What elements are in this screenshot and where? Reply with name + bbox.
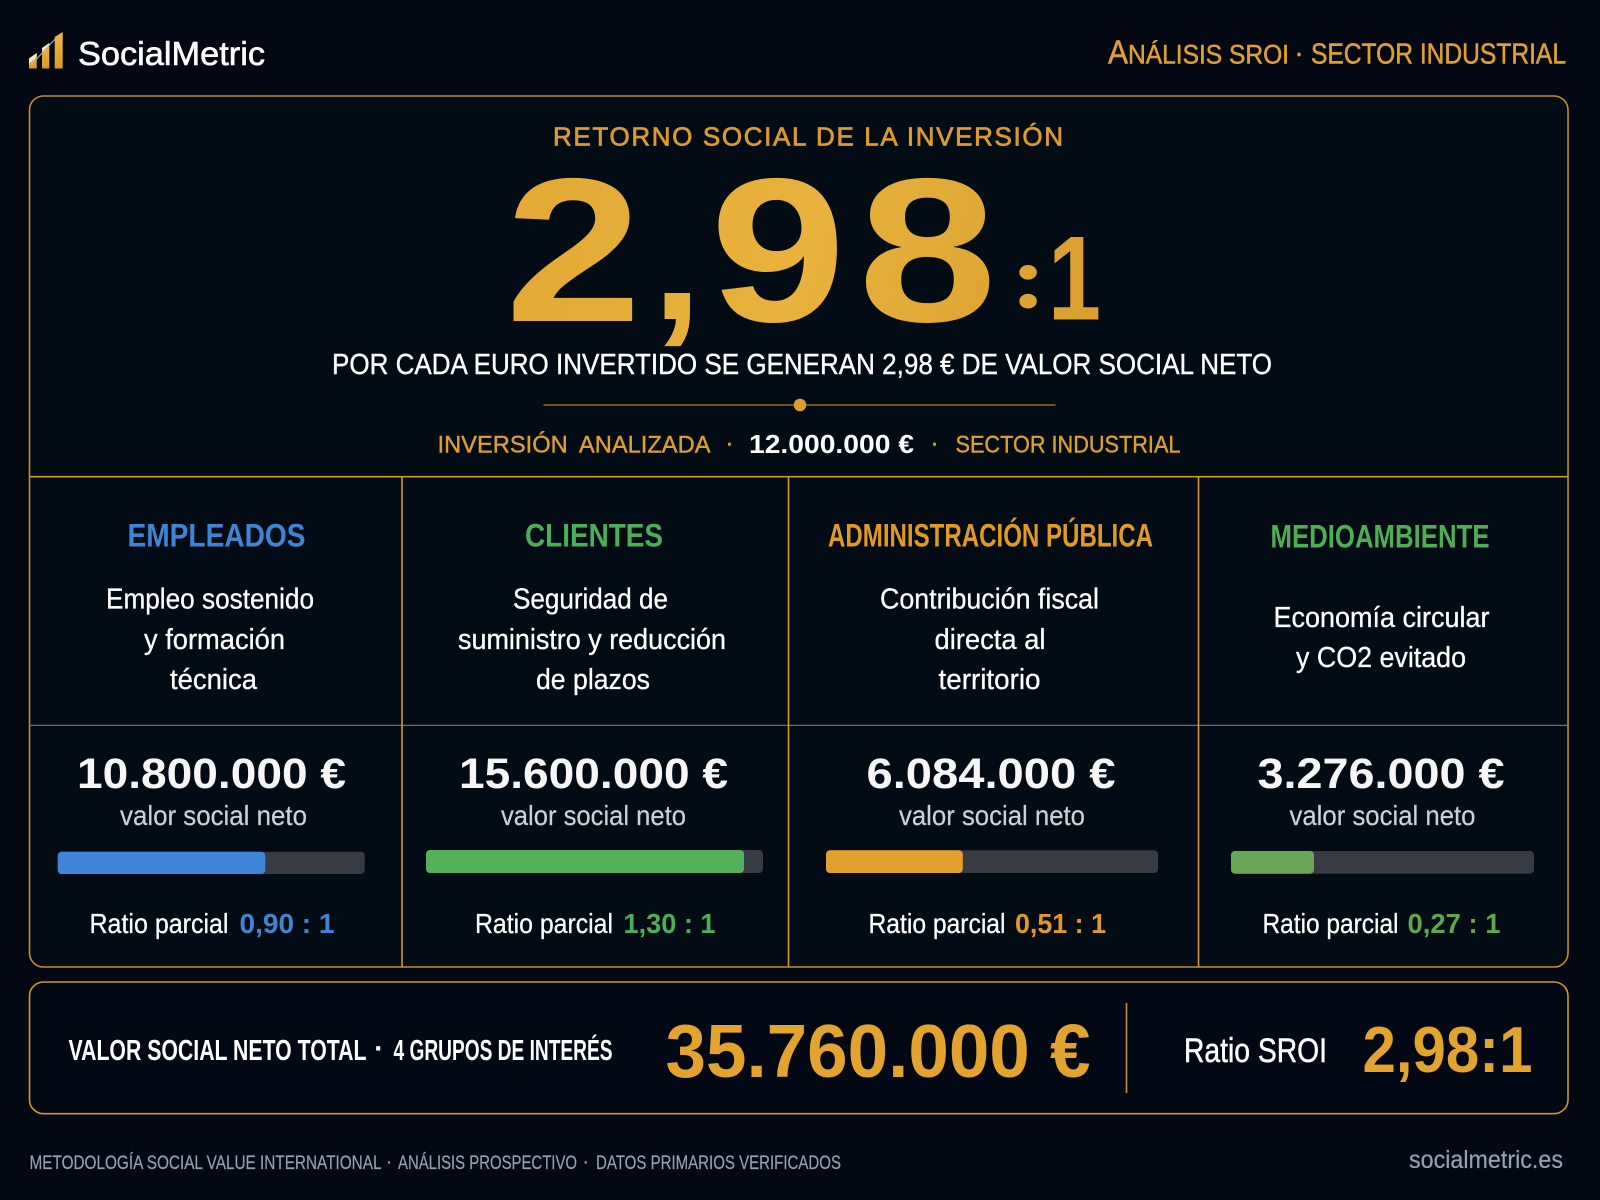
heading: CLIENTES xyxy=(525,518,663,554)
investment info line: 12.000.000 € xyxy=(749,429,914,459)
subtitle: POR CADA EURO INVERTIDO SE GENERAN 2,98 € DE VALOR SOCIAL NETO xyxy=(332,349,1272,381)
footer xyxy=(30,1146,1563,1174)
big ratio 2,98:1: : xyxy=(1010,228,1046,327)
methodology note: ANÁLISIS PROSPECTIVO xyxy=(398,1153,577,1174)
progress bar xyxy=(826,850,1158,873)
partial ratio xyxy=(90,908,334,939)
logo wordmark: SocialMetric xyxy=(78,35,265,72)
big ratio 2,98:1: 2 xyxy=(505,136,642,365)
partial ratio: Ratio parcial xyxy=(90,908,228,939)
column: medioambiente xyxy=(1231,518,1534,939)
description: directa al xyxy=(934,624,1046,656)
value: 15.600.000 € xyxy=(459,750,728,798)
icon: SocialMetric logo bars xyxy=(29,32,63,68)
description: suministro y reducción xyxy=(458,624,726,656)
methodology note: · xyxy=(583,1152,589,1173)
description: técnica xyxy=(170,664,258,696)
website: socialmetric.es xyxy=(1409,1146,1563,1174)
description xyxy=(106,583,314,696)
description: Contribución fiscal xyxy=(880,583,1099,615)
value caption: valor social neto xyxy=(1290,800,1476,831)
header xyxy=(29,32,1566,72)
investment info line: SECTOR INDUSTRIAL xyxy=(956,432,1180,459)
partial ratio: 1,30 : 1 xyxy=(624,908,716,939)
description: Empleo sostenido xyxy=(106,583,314,615)
progress bar xyxy=(1231,851,1534,874)
progress bar xyxy=(58,852,365,874)
hero label: RETORNO SOCIAL DE LA INVERSIÓN xyxy=(553,122,1063,152)
partial ratio xyxy=(868,908,1106,939)
total value: 35.760.000 € xyxy=(666,1009,1090,1093)
value: 6.084.000 € xyxy=(866,750,1116,798)
description xyxy=(880,583,1099,696)
investment info line: · xyxy=(930,430,938,457)
value caption: valor social neto xyxy=(501,800,686,831)
heading: MEDIOAMBIENTE xyxy=(1270,518,1490,554)
partial ratio: Ratio parcial xyxy=(475,908,613,939)
big ratio 2,98:1 xyxy=(505,136,1101,365)
column: empleados xyxy=(58,518,365,939)
progress bar xyxy=(426,850,763,873)
partial ratio: 0,51 : 1 xyxy=(1015,908,1106,939)
partial ratio: 0,90 : 1 xyxy=(240,908,334,939)
description xyxy=(1274,602,1490,674)
panel: total xyxy=(30,982,1568,1114)
description: y formación xyxy=(144,624,285,656)
ornament divider xyxy=(544,399,1056,411)
value: 3.276.000 € xyxy=(1258,750,1505,798)
description: Economía circular xyxy=(1274,602,1490,634)
value caption: valor social neto xyxy=(120,800,307,831)
value caption: valor social neto xyxy=(899,800,1085,831)
description: de plazos xyxy=(536,664,650,696)
SROI ratio value: 2,98:1 xyxy=(1362,1013,1532,1086)
total label: 4 GRUPOS DE INTERÉS xyxy=(394,1033,612,1067)
report tag: ANÁLISIS SROI xyxy=(1108,34,1289,70)
report tag: · xyxy=(1294,37,1304,68)
partial ratio: Ratio parcial xyxy=(1262,908,1398,939)
methodology note: DATOS PRIMARIOS VERIFICADOS xyxy=(596,1153,841,1174)
big ratio 2,98:1: , xyxy=(652,162,702,357)
big ratio 2,98:1: 9 xyxy=(710,136,846,365)
SROI ratio label: Ratio SROI xyxy=(1184,1032,1327,1070)
methodology note: · xyxy=(386,1152,392,1173)
description xyxy=(458,583,726,696)
methodology note: METODOLOGÍA SOCIAL VALUE INTERNATIONAL xyxy=(30,1153,382,1174)
partial ratio: Ratio parcial xyxy=(868,908,1006,939)
partial ratio xyxy=(1262,908,1500,939)
partial ratio xyxy=(475,908,716,939)
description: territorio xyxy=(938,664,1040,696)
big ratio 2,98:1: 8 xyxy=(858,136,997,365)
value: 10.800.000 € xyxy=(77,750,346,798)
description: Seguridad de xyxy=(513,583,668,615)
big ratio 2,98:1: 1 xyxy=(1048,212,1101,346)
partial ratio: 0,27 : 1 xyxy=(1408,908,1500,939)
heading: EMPLEADOS xyxy=(128,518,306,554)
description: y CO2 evitado xyxy=(1296,642,1466,674)
investment info line xyxy=(438,429,1180,459)
total label: VALOR SOCIAL NETO TOTAL xyxy=(68,1035,366,1067)
heading: ADMINISTRACIÓN PÚBLICA xyxy=(828,518,1153,554)
report tag xyxy=(1108,34,1566,70)
hero: headline ratio xyxy=(332,122,1272,459)
column: clientes xyxy=(426,518,763,939)
investment info line: · xyxy=(726,430,734,457)
column: administración pública xyxy=(826,518,1158,939)
methodology note xyxy=(30,1152,841,1174)
panel: main results xyxy=(30,96,1568,967)
total label: · xyxy=(374,1033,384,1065)
investment info line: INVERSIÓN ANALIZADA xyxy=(438,432,710,459)
